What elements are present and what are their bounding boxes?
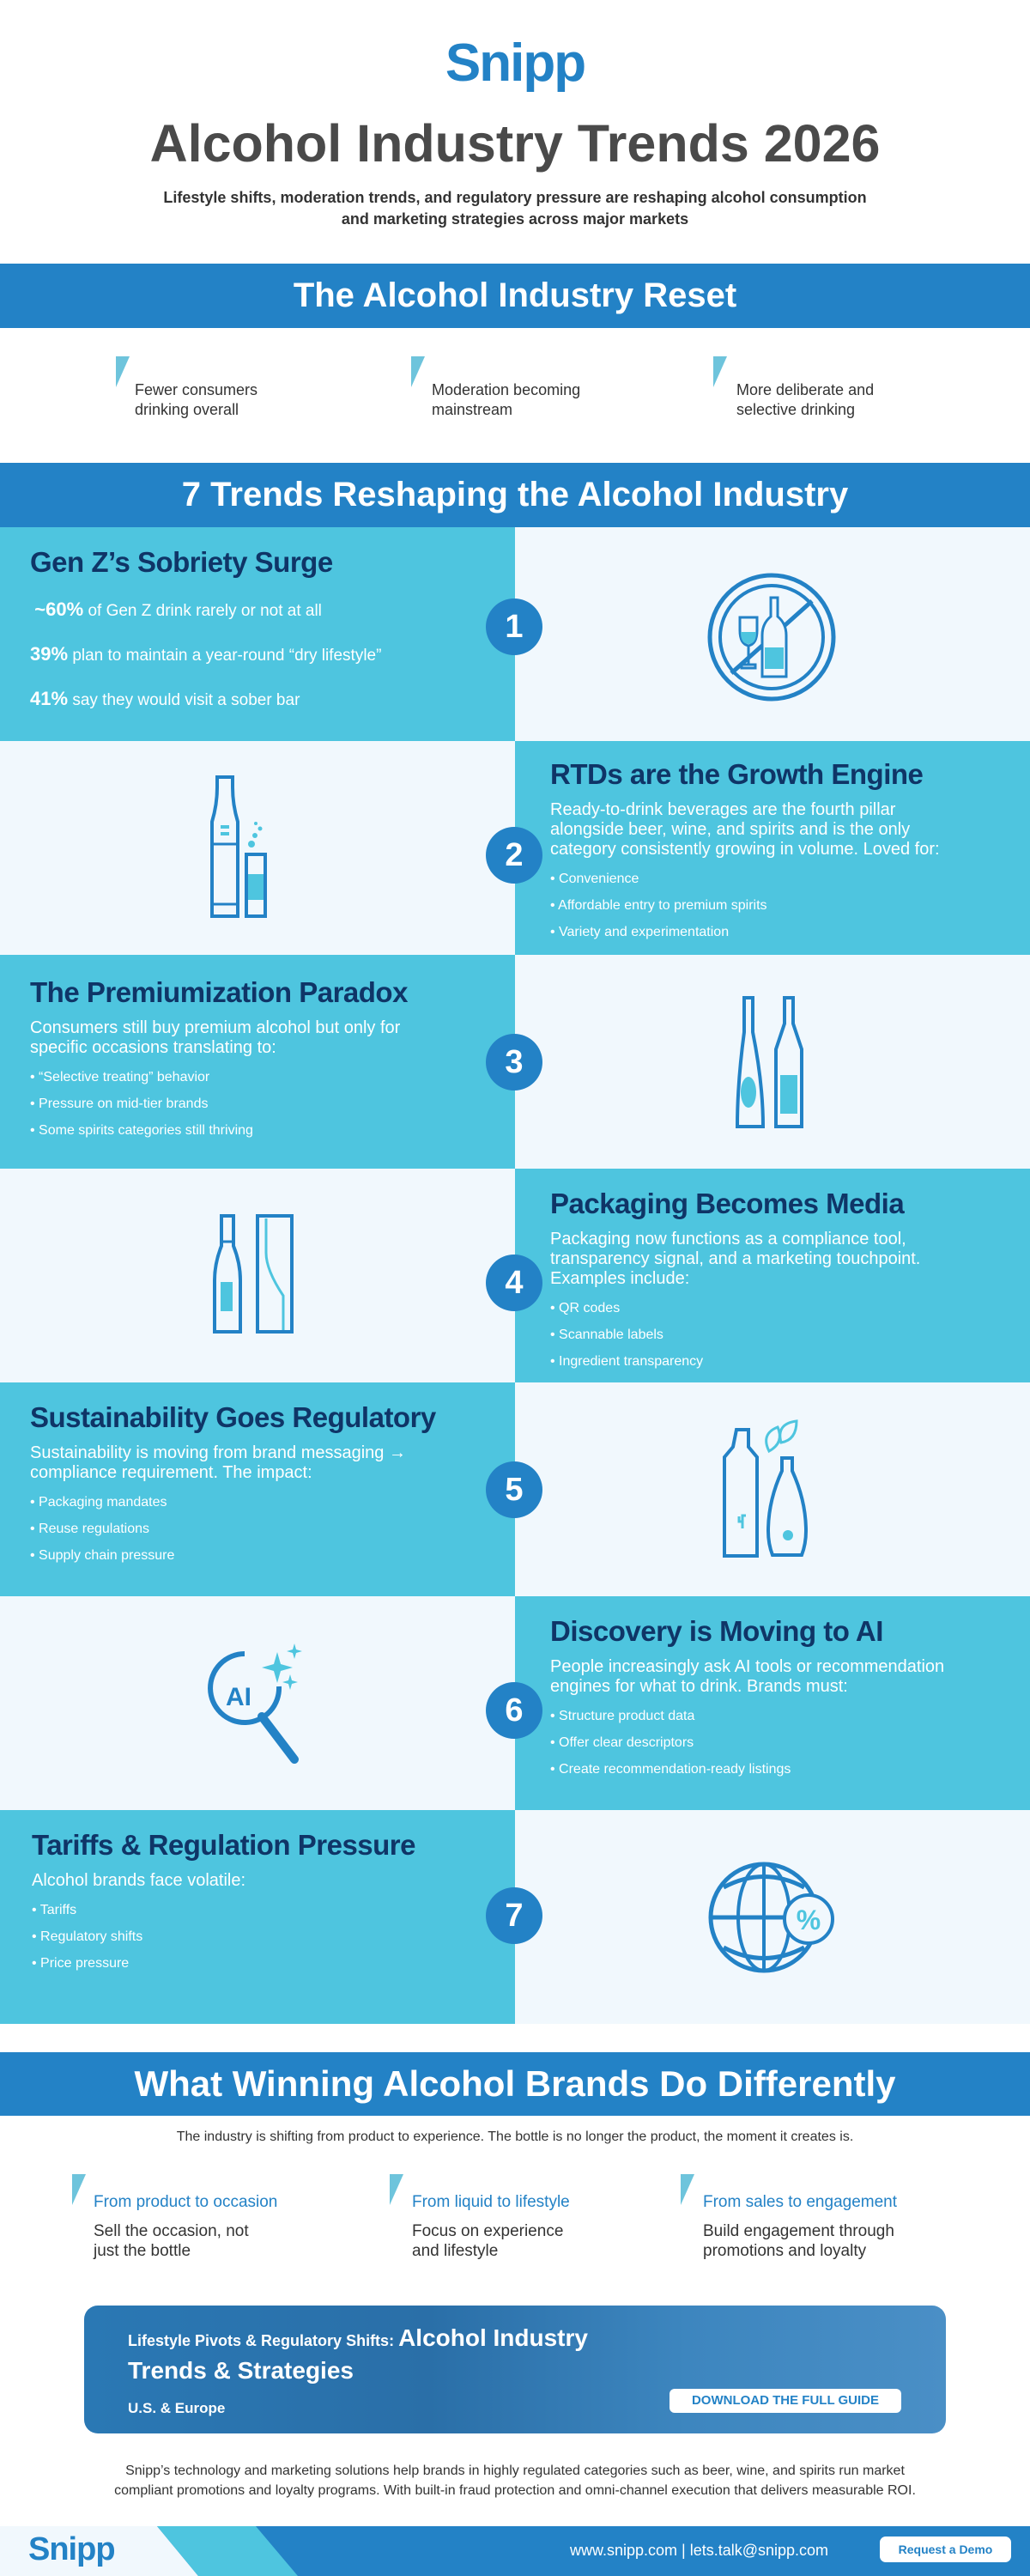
subtitle	[163, 189, 867, 228]
text: trend 2: RTDs are the Growth Engine	[550, 758, 923, 790]
logo: Snipp	[445, 33, 585, 93]
number 7	[486, 1887, 542, 1944]
icon: eco bottles	[723, 1419, 808, 1558]
band: 7 trends: 7 Trends Reshaping the Alcohol Industry	[182, 476, 848, 513]
text: trend 1: 41% say they would visit a sober bar	[30, 688, 300, 709]
subtitle: Lifestyle shifts, moderation trends, and regulatory pressure are reshaping alcohol consumption	[163, 189, 867, 206]
text: trend 2: Variety and experimentation	[559, 925, 729, 939]
icon: globe with percent	[709, 1862, 834, 1973]
footer bar	[0, 2526, 1030, 2576]
text: trend 6: engines for what to drink. Brands must:	[550, 1677, 848, 1696]
button: download	[670, 2389, 901, 2413]
trend 7	[0, 1810, 1030, 2024]
shift 3: From sales to engagement	[703, 2193, 897, 2211]
banner title: Lifestyle Pivots & Regulatory Shifts: Alcohol Industry	[128, 2324, 588, 2351]
text: trend 5	[30, 1401, 436, 1563]
text: trend 3: Consumers still buy premium alcohol but only for	[30, 1018, 400, 1037]
icon: no alcohol	[707, 574, 836, 701]
text: trend 3: The Premiumization Paradox	[30, 976, 408, 1008]
item 2	[411, 356, 580, 418]
band: 7 trends	[0, 463, 1030, 527]
banner title	[128, 2324, 588, 2384]
number 4	[486, 1255, 542, 1311]
text: trend 3: “Selective treating” behavior	[39, 1070, 209, 1084]
text: trend 5: Reuse regulations	[39, 1522, 149, 1536]
text: trend 6: Offer clear descriptors	[559, 1735, 694, 1750]
icon: AI search	[208, 1643, 302, 1764]
text: trend 5: Sustainability is moving from brand messaging →	[30, 1443, 406, 1462]
text: trend 2: Ready-to-drink beverages are the fourth pillar	[550, 800, 895, 819]
shift 3: Build engagement through	[703, 2222, 894, 2240]
shift items	[72, 2174, 897, 2260]
text: trend 4: Packaging now functions as a compliance tool,	[550, 1230, 906, 1249]
number 3: 3	[505, 1044, 524, 1080]
number 7: 7	[505, 1898, 524, 1934]
text: trend 4	[550, 1188, 920, 1369]
footer paragraph: compliant promotions and loyalty programs. With built-in fraud protection and omni-channel execution that delivers measurable ROI.	[114, 2483, 916, 2498]
footer logo: Snipp	[28, 2531, 115, 2567]
text: trend 6: People increasingly ask AI tools or recommendation	[550, 1657, 944, 1676]
item 3: More deliberate and	[736, 381, 874, 398]
tagline: The industry is shifting from product to experience. The bottle is no longer the product, the moment it creates is.	[177, 2129, 853, 2144]
text: trend 1	[30, 546, 381, 709]
title: Alcohol Industry Trends 2026	[150, 114, 880, 173]
text: trend 1: 39% plan to maintain a year-round “dry lifestyle”	[30, 643, 381, 665]
footer paragraph: Snipp’s technology and marketing solutions help brands in highly regulated categories such as beer, wine, and spirits run market	[125, 2464, 905, 2478]
item 3	[713, 356, 874, 418]
number 6: 6	[505, 1692, 524, 1728]
item 1	[116, 356, 258, 418]
text: trend 4: Ingredient transparency	[559, 1354, 703, 1369]
text: trend 2	[550, 758, 940, 939]
subtitle: and marketing strategies across major markets	[342, 210, 688, 228]
text: trend 7: Alcohol brands face volatile:	[32, 1871, 245, 1890]
number 6	[486, 1682, 542, 1739]
shift 1: just the bottle	[94, 2242, 191, 2260]
text: trend 2: alongside beer, wine, and spirits and is the only	[550, 820, 910, 839]
shift 1: From product to occasion	[94, 2193, 277, 2211]
shift 2: From liquid to lifestyle	[412, 2193, 570, 2211]
text: trend 4: transparency signal, and a marketing touchpoint.	[550, 1249, 920, 1268]
text: trend 7	[32, 1829, 415, 1971]
button: request demo: Request a Demo	[899, 2543, 992, 2556]
text: trend 3	[30, 976, 409, 1138]
text: trend 6: Discovery is Moving to AI	[550, 1615, 883, 1647]
text: trend 6: Create recommendation-ready listings	[559, 1762, 791, 1777]
footer paragraph	[114, 2464, 916, 2498]
shift 2: and lifestyle	[412, 2242, 498, 2260]
number 4: 4	[505, 1265, 524, 1301]
trend 4	[0, 1169, 1030, 1382]
text: trend 1: ~60% of Gen Z drink rarely or not at all	[34, 598, 322, 620]
text: trend 4: QR codes	[559, 1301, 620, 1315]
shift 2	[390, 2174, 570, 2260]
text: trend 4: Scannable labels	[559, 1327, 663, 1342]
shift 2: Focus on experience	[412, 2222, 563, 2240]
item 1: Fewer consumers	[135, 381, 258, 398]
text: trend 7: Tariffs & Regulation Pressure	[32, 1829, 415, 1861]
text: trend 2: category consistently growing in volume. Loved for:	[550, 840, 940, 859]
trend 5	[0, 1382, 1030, 1596]
band: reset	[0, 264, 1030, 328]
contact: www.snipp.com | lets.talk@snipp.com	[570, 2542, 828, 2559]
number 5	[486, 1461, 542, 1518]
icon: two bottles	[736, 996, 803, 1128]
trend 2	[0, 741, 1030, 955]
text: trend 7: Tariffs	[40, 1903, 76, 1917]
number 5: 5	[505, 1472, 524, 1508]
shift 3: promotions and loyalty	[703, 2242, 866, 2260]
icon: globe with percent: %	[797, 1905, 821, 1935]
text: trend 2: Affordable entry to premium spirits	[558, 898, 767, 913]
number 1	[486, 598, 542, 655]
reset items	[116, 356, 874, 418]
text: trend 1: Gen Z’s Sobriety Surge	[30, 546, 333, 578]
button: download: DOWNLOAD THE FULL GUIDE	[692, 2393, 879, 2408]
text: trend 3: Some spirits categories still thriving	[39, 1123, 253, 1138]
icon: packaging	[213, 1214, 294, 1334]
shift 1: Sell the occasion, not	[94, 2222, 249, 2240]
shift 3	[681, 2174, 897, 2260]
icon: bottle and can	[210, 775, 267, 918]
text: trend 2: Convenience	[559, 872, 639, 886]
banner: download guide	[84, 2306, 946, 2433]
text: trend 5: Supply chain pressure	[39, 1548, 174, 1563]
text: trend 5: compliance requirement. The impact:	[30, 1463, 312, 1482]
item 3: selective drinking	[736, 401, 855, 418]
text: trend 7: Price pressure	[40, 1956, 129, 1971]
item 2: Moderation becoming	[432, 381, 580, 398]
text: trend 6	[550, 1615, 944, 1777]
button: request demo	[880, 2537, 1011, 2562]
number 2	[486, 827, 542, 884]
icon: AI search: AI	[226, 1683, 251, 1711]
trend 3	[0, 955, 1030, 1169]
trend 1	[0, 527, 1030, 741]
banner region: U.S. & Europe	[128, 2400, 225, 2416]
text: trend 4: Packaging Becomes Media	[550, 1188, 904, 1219]
text: trend 3: Pressure on mid-tier brands	[39, 1097, 208, 1111]
number 2: 2	[505, 837, 524, 873]
text: trend 4: Examples include:	[550, 1269, 689, 1288]
item 1: drinking overall	[135, 401, 239, 418]
item 2: mainstream	[432, 401, 512, 418]
number 3	[486, 1034, 542, 1091]
text: trend 3: specific occasions translating to:	[30, 1038, 276, 1057]
text: trend 7: Regulatory shifts	[40, 1929, 142, 1944]
band: winning brands: What Winning Alcohol Brands Do Differently	[134, 2063, 896, 2104]
text: trend 6: Structure product data	[559, 1709, 694, 1723]
trend 6	[0, 1596, 1030, 1810]
text: trend 5: Sustainability Goes Regulatory	[30, 1401, 436, 1433]
band: winning brands	[0, 2052, 1030, 2116]
band: reset: The Alcohol Industry Reset	[294, 276, 736, 314]
number 1: 1	[505, 609, 524, 645]
banner title: Trends & Strategies	[128, 2357, 354, 2384]
text: trend 5: Packaging mandates	[39, 1495, 167, 1510]
shift 1	[72, 2174, 277, 2260]
